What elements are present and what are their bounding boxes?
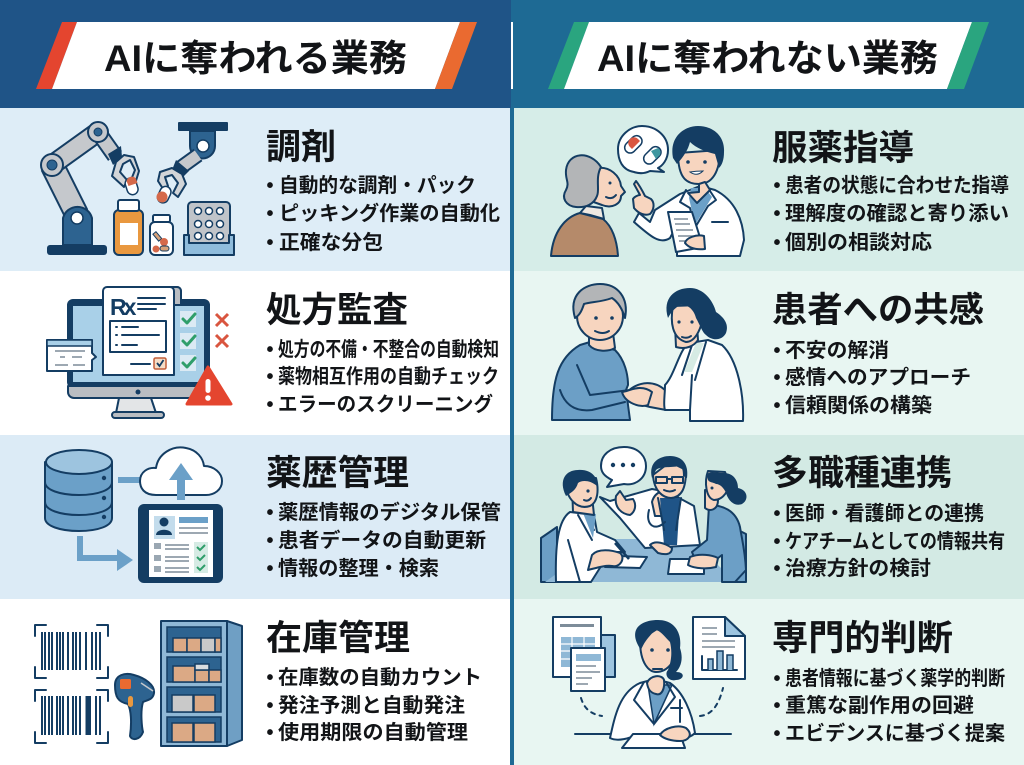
- bullet list: [266, 338, 499, 416]
- icon: robot arms and medicine: [41, 122, 234, 255]
- panel: 専門的判断: [513, 599, 1024, 765]
- bullet list: [774, 339, 971, 417]
- Rx mark: Rx: [110, 294, 137, 320]
- icon: database, cloud and tablet: [45, 447, 223, 583]
- icon: pharmacist advising elderly patient: [551, 126, 744, 256]
- bullet list: •: [266, 667, 274, 689]
- bullet list: •: [266, 394, 274, 416]
- bullet list: •: [774, 503, 781, 525]
- bullet list: 治療方針の検討: [785, 557, 931, 580]
- bullet list: [266, 500, 501, 580]
- heading: 在庫管理: [266, 619, 410, 658]
- bullet list: [774, 501, 1005, 580]
- bullet list: 薬歴情報のデジタル保管: [278, 500, 501, 524]
- bullet list: [774, 173, 1009, 254]
- bullet list: 重篤な副作用の回避: [785, 694, 974, 717]
- bullet list: 個別の相談対応: [785, 231, 932, 254]
- bullet list: •: [774, 531, 781, 553]
- left title banner: AIに奪われる業務: [104, 38, 407, 79]
- bullet list: 患者の状態に合わせた指導: [785, 173, 1009, 197]
- bullet list: エビデンスに基づく提案: [785, 721, 1005, 745]
- bullet list: 処方の不備・不整合の自動検知: [278, 338, 499, 361]
- heading: 多職種連携: [772, 454, 952, 493]
- panel: 患者への共感: [513, 271, 1024, 435]
- right title banner: AIに奪われない業務: [597, 38, 938, 79]
- bullet list: •: [266, 558, 274, 580]
- bullet list: 薬物相互作用の自動チェック: [278, 365, 499, 388]
- bullet list: 感情へのアプローチ: [785, 365, 971, 389]
- panel: 薬歴管理: [0, 435, 511, 599]
- bullet list: •: [774, 395, 781, 417]
- left title banner: [36, 22, 477, 89]
- panel: 調剤: [0, 108, 511, 271]
- bullet list: •: [266, 175, 274, 197]
- bullet list: 在庫数の自動カウント: [278, 666, 482, 689]
- bullet list: エラーのスクリーニング: [278, 392, 493, 416]
- heading: 処方監査: [266, 291, 408, 330]
- bullet list: •: [774, 175, 781, 197]
- bullet list: 発注予測と自動発注: [278, 694, 465, 717]
- bullet list: 患者データの自動更新: [278, 528, 486, 552]
- heading: 薬歴管理: [266, 454, 409, 493]
- bullet list: •: [266, 502, 274, 524]
- panel: 処方監査: [0, 271, 511, 435]
- right header: [511, 0, 1024, 108]
- bullet list: 不安の解消: [785, 339, 889, 362]
- bullet list: •: [774, 367, 781, 389]
- icon: barcodes, scanner and shelf: [35, 621, 242, 746]
- panel: 多職種連携: [513, 435, 1024, 599]
- bullet list: 自動的な調剤・パック: [279, 174, 476, 197]
- icon: pharmacist holding patient's hands: [552, 284, 743, 421]
- bullet list: •: [774, 232, 781, 254]
- bullet list: •: [774, 668, 781, 690]
- bullet list: 情報の整理・検索: [278, 557, 439, 580]
- bullet list: •: [774, 558, 781, 580]
- bullet list: •: [266, 339, 274, 361]
- bullet list: 医師・看護師との連携: [785, 501, 984, 525]
- bullet list: •: [266, 232, 274, 254]
- bullet list: •: [266, 722, 274, 744]
- bullet list: •: [266, 203, 274, 225]
- bullet list: •: [774, 340, 781, 362]
- bullet list: 信頼関係の構築: [785, 394, 932, 417]
- heading: 患者への共感: [772, 291, 984, 330]
- bullet list: •: [774, 723, 781, 745]
- bullet list: [266, 666, 482, 744]
- bullet list: 正確な分包: [279, 231, 383, 254]
- bullet list: ピッキング作業の自動化: [279, 201, 500, 225]
- bullet list: •: [774, 203, 781, 225]
- left header: [0, 0, 511, 108]
- bullet list: [266, 174, 500, 254]
- bullet list: 理解度の確認と寄り添い: [785, 202, 1009, 225]
- panel: 在庫管理: [0, 599, 511, 765]
- icon: pharmacist thinking with documents: [553, 617, 745, 748]
- bullet list: 使用期限の自動管理: [278, 721, 468, 744]
- center divider: [510, 22, 514, 765]
- heading: 服薬指導: [772, 129, 914, 168]
- right title banner: [548, 22, 989, 89]
- bullet list: •: [774, 695, 781, 717]
- icon: monitor with prescription and warning: [47, 287, 231, 418]
- bullet list: •: [266, 530, 274, 552]
- bullet list: •: [266, 695, 274, 717]
- panel: 服薬指導: [513, 108, 1024, 271]
- icon: team meeting: [541, 447, 747, 582]
- heading: 専門的判断: [772, 619, 953, 658]
- bullet list: •: [266, 366, 274, 388]
- bullet list: [774, 667, 1005, 745]
- heading: 調剤: [266, 128, 336, 167]
